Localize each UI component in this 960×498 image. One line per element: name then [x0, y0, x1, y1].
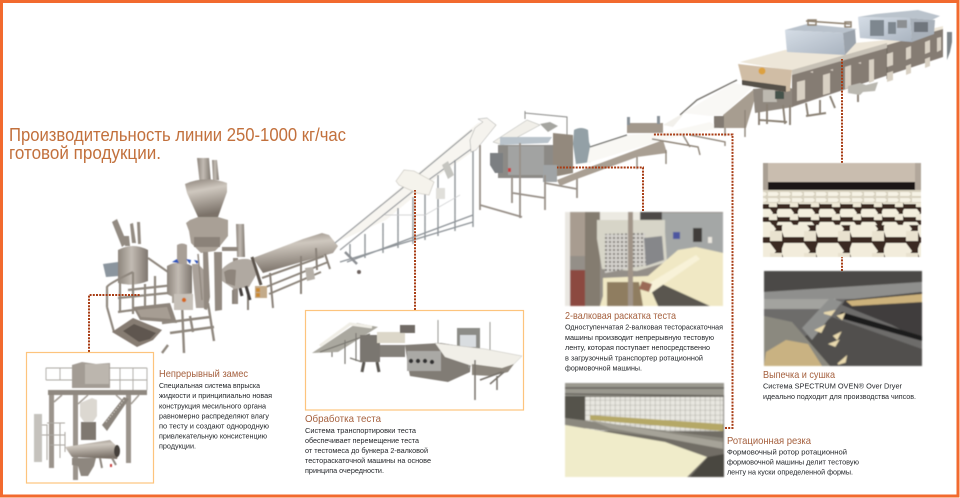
- panel: dough handling: [305, 310, 524, 475]
- description: конструкция месильного органа: [159, 402, 267, 410]
- callout connector: baking and drying: [841, 59, 843, 163]
- callout connector: dough handling: [414, 190, 416, 310]
- photo: dough sheeter rollers: [565, 212, 723, 306]
- description: [727, 448, 859, 476]
- description: в загрузочный транспортер ротационной: [565, 354, 703, 362]
- description: жидкости и принципиально новая: [159, 391, 272, 400]
- panel: rotary cutting: [565, 383, 859, 477]
- callout connector: two-roll sheeting: [557, 168, 643, 211]
- heading: Непрерывный замес: [159, 368, 248, 380]
- production line illustration: [103, 10, 952, 353]
- machine: continuous mixing station: [103, 158, 338, 353]
- machine: connecting conveyors: [557, 80, 858, 186]
- panel: continuous mixing: [26, 352, 272, 483]
- description: [305, 426, 431, 475]
- photo frame: dough handling equipment: [306, 310, 524, 410]
- description: Формовочный ротор ротационной: [727, 448, 847, 456]
- description: Одноступенчатая 2-валковая тестораскаточная: [565, 322, 723, 332]
- description: Специальная система впрыска: [159, 381, 261, 390]
- description: машины производит непрерывную тестовую: [565, 333, 714, 342]
- photo: rotary cutter: [565, 383, 724, 477]
- description: Система транспортировки теста: [305, 426, 417, 435]
- description: формовочной машины.: [565, 364, 642, 372]
- description: [565, 322, 723, 372]
- description: принципа очередности.: [305, 466, 384, 475]
- description: обеспечивает перемещение теста: [305, 436, 420, 445]
- panel: baking and drying: [763, 163, 922, 401]
- heading: Выпечка и сушка: [763, 369, 835, 381]
- description: равномерно распределяют влагу: [159, 412, 269, 420]
- machine: inclined dough conveyor: [335, 120, 497, 274]
- description: продукции.: [159, 442, 196, 450]
- heading: 2-валковая раскатка теста: [565, 310, 676, 322]
- description: от тестомеса до бункера 2-валковой: [305, 446, 428, 455]
- description: формовочной машины делит тестовую: [727, 458, 859, 466]
- machine: oven and dryer: [738, 10, 952, 107]
- description: [159, 381, 272, 450]
- callout connector: rotary cutting: [653, 134, 732, 428]
- machine: two-roll dough sheeter: [470, 111, 591, 218]
- heading: Ротационная резка: [727, 435, 811, 447]
- photo frame: mixer installation: [26, 352, 154, 483]
- description: привлекательную консистенцию: [159, 432, 267, 440]
- description: идеально подходит для производства чипсов.: [763, 392, 916, 401]
- description: Система SPECTRUM OVEN® Over Dryer: [763, 382, 903, 390]
- callout connector: continuous mixing: [89, 295, 140, 352]
- description: тестораскаточной машины на основе: [305, 456, 431, 465]
- photo: chips on dryer belt: [764, 271, 922, 366]
- description: по тесту и создают однородную: [159, 422, 269, 430]
- title: [9, 124, 346, 163]
- photo: chips entering oven: [763, 163, 921, 257]
- description: [763, 382, 916, 401]
- panel: two-roll dough sheeting: [565, 212, 723, 372]
- callout connector: between oven photos: [841, 257, 843, 271]
- description: ленту на куски определенной формы.: [727, 468, 853, 476]
- title: Производительность линии 250-1000 кг/час: [9, 124, 346, 145]
- description: ленту, которая поступает непосредственно: [565, 343, 710, 352]
- title: готовой продукции.: [9, 142, 161, 163]
- heading: Обработка теста: [305, 413, 381, 425]
